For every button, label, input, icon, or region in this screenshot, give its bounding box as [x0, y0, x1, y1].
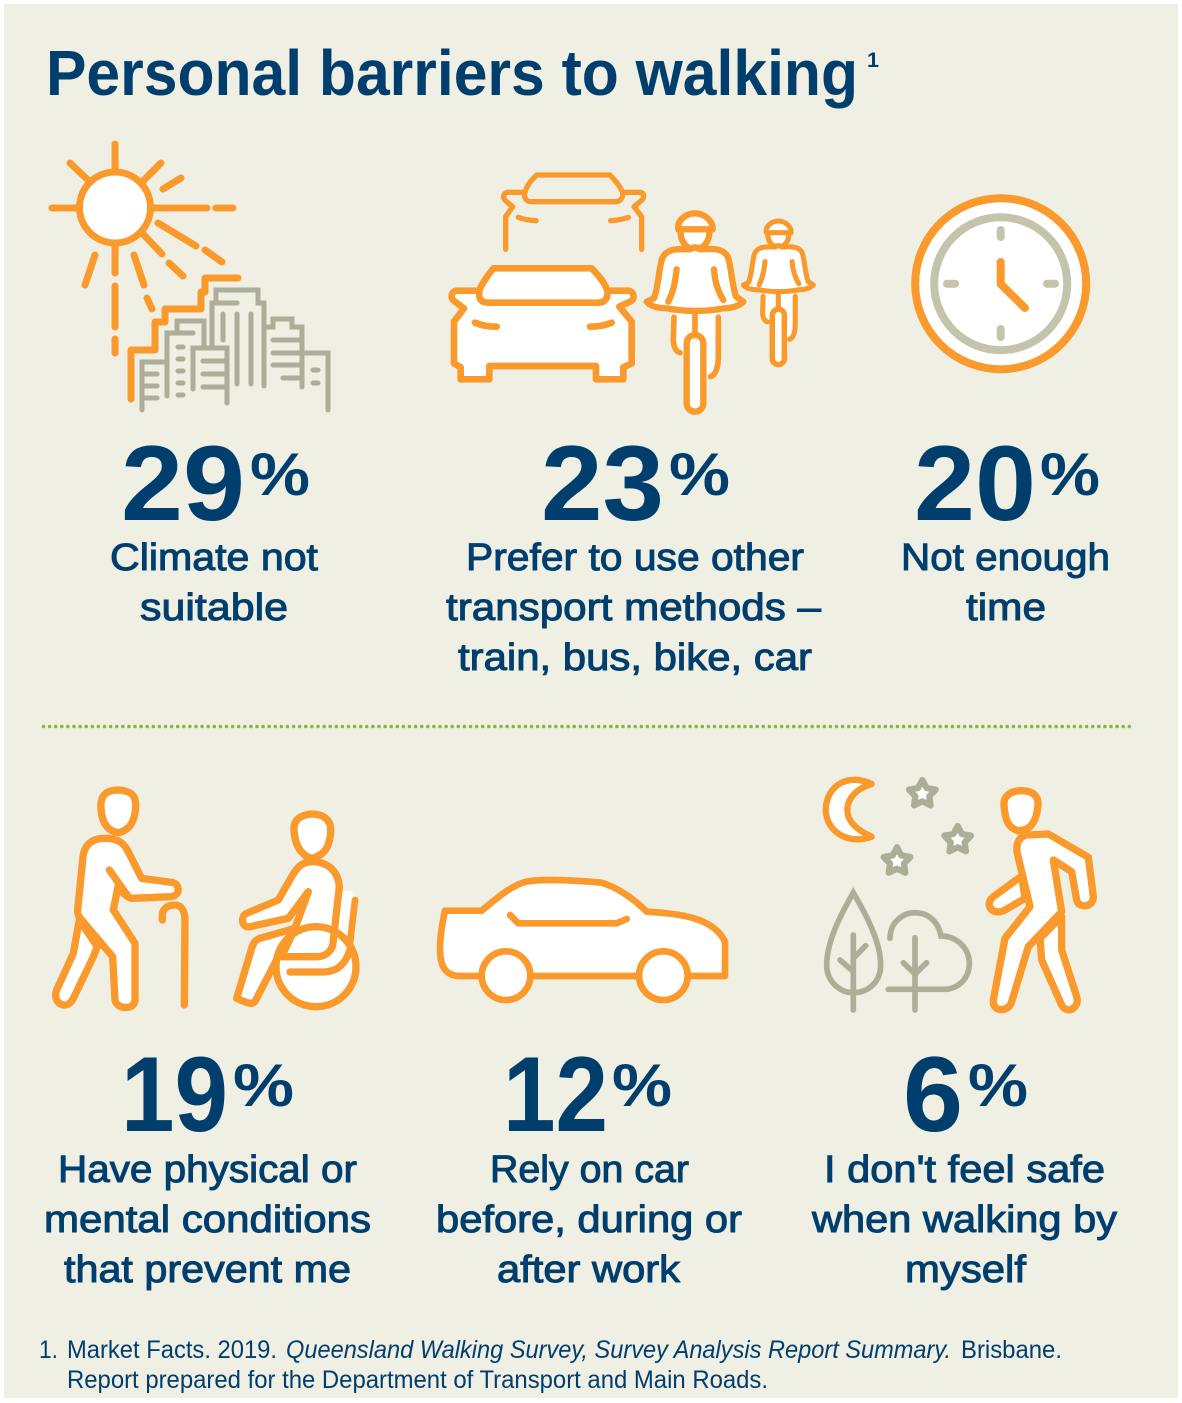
percentage: 29%: [121, 423, 310, 543]
percentage: 19%: 19: [121, 1034, 228, 1154]
icon: clock: [915, 198, 1086, 369]
label: have physical or mental conditions: Have physical or: [58, 1149, 357, 1191]
icon: person with cane and person in wheelchair: [56, 790, 357, 1007]
percentage: 19%: %: [233, 1052, 294, 1119]
label: climate not suitable: [110, 537, 318, 629]
label: rely on car: Rely on car: [490, 1149, 689, 1191]
percentage: 6%: 6: [903, 1034, 963, 1154]
person in wheelchair: [237, 814, 357, 1007]
label: prefer to use other transport: [446, 537, 822, 679]
label: do not feel safe: myself: [905, 1249, 1026, 1291]
label: climate not suitable: Climate not: [110, 537, 318, 579]
footnote: 1.: [39, 1336, 58, 1364]
percentage: 20%: %: [1040, 441, 1100, 508]
footnote: Queensland Walking Survey, Survey Analysis Report Summary.: [286, 1336, 951, 1364]
title: Personal barriers to walking: [46, 37, 858, 109]
large cyclist: [647, 213, 743, 412]
icon: cars and cyclists: [452, 175, 813, 412]
percentage: 29%: 29: [121, 423, 245, 543]
percentage: 20%: [914, 423, 1100, 543]
person with cane: [56, 790, 185, 1007]
percentage: 23%: 23: [541, 423, 664, 543]
label: prefer to use other transport: transport methods –: [446, 587, 822, 629]
label: rely on car: after work: [497, 1249, 681, 1291]
panel: climate not suitable: [52, 144, 328, 629]
small cyclist: [743, 221, 813, 365]
label: rely on car: [436, 1149, 742, 1291]
label: do not feel safe: I don't feel safe: [824, 1149, 1105, 1191]
footnote: [39, 1336, 1062, 1394]
footnote: Market Facts. 2019.: [67, 1336, 277, 1364]
icon: side view car: [440, 880, 725, 1000]
footnote: Brisbane.: [961, 1336, 1062, 1364]
percentage: 20%: 20: [914, 423, 1036, 543]
footnote: Report prepared for the Department of Transport and Main Roads.: [67, 1366, 768, 1394]
label: have physical or mental conditions: [44, 1149, 371, 1291]
stars: [884, 780, 971, 873]
panel: physical or mental conditions: [44, 790, 371, 1291]
label: have physical or mental conditions: that prevent me: [64, 1249, 351, 1291]
rear car: [504, 175, 644, 249]
label: climate not suitable: suitable: [140, 587, 288, 629]
label: do not feel safe: when walking by: [811, 1199, 1117, 1241]
label: not enough time: [901, 537, 1110, 629]
walking person: [989, 791, 1093, 1010]
moon: [826, 780, 872, 839]
trees: [827, 893, 969, 1010]
panel: rely on car: [436, 880, 742, 1291]
label: prefer to use other transport: train, bus, bike, car: [458, 637, 812, 679]
percentage: 12%: 12: [503, 1034, 608, 1154]
percentage: 29%: %: [250, 441, 310, 508]
panel: do not feel safe: [811, 780, 1117, 1291]
title: 1: [867, 49, 879, 72]
percentage: 6%: [903, 1034, 1028, 1154]
panel: prefer other transport: [446, 175, 822, 679]
panel: not enough time: [901, 198, 1110, 629]
percentage: 12%: %: [612, 1052, 672, 1119]
icon: sun over city: [52, 144, 328, 410]
percentage: 19%: [121, 1034, 294, 1154]
label: not enough time: time: [966, 587, 1046, 629]
front car: [452, 268, 634, 379]
label: prefer to use other transport: Prefer to use other: [466, 537, 804, 579]
label: do not feel safe: [811, 1149, 1117, 1291]
icon: night scene with walking person: [826, 780, 1093, 1010]
label: have physical or mental conditions: mental conditions: [44, 1199, 371, 1241]
label: rely on car: before, during or: [436, 1199, 742, 1241]
percentage: 23%: [541, 423, 730, 543]
percentage: 23%: %: [669, 441, 730, 508]
percentage: 6%: %: [968, 1052, 1028, 1119]
label: not enough time: Not enough: [901, 537, 1110, 579]
